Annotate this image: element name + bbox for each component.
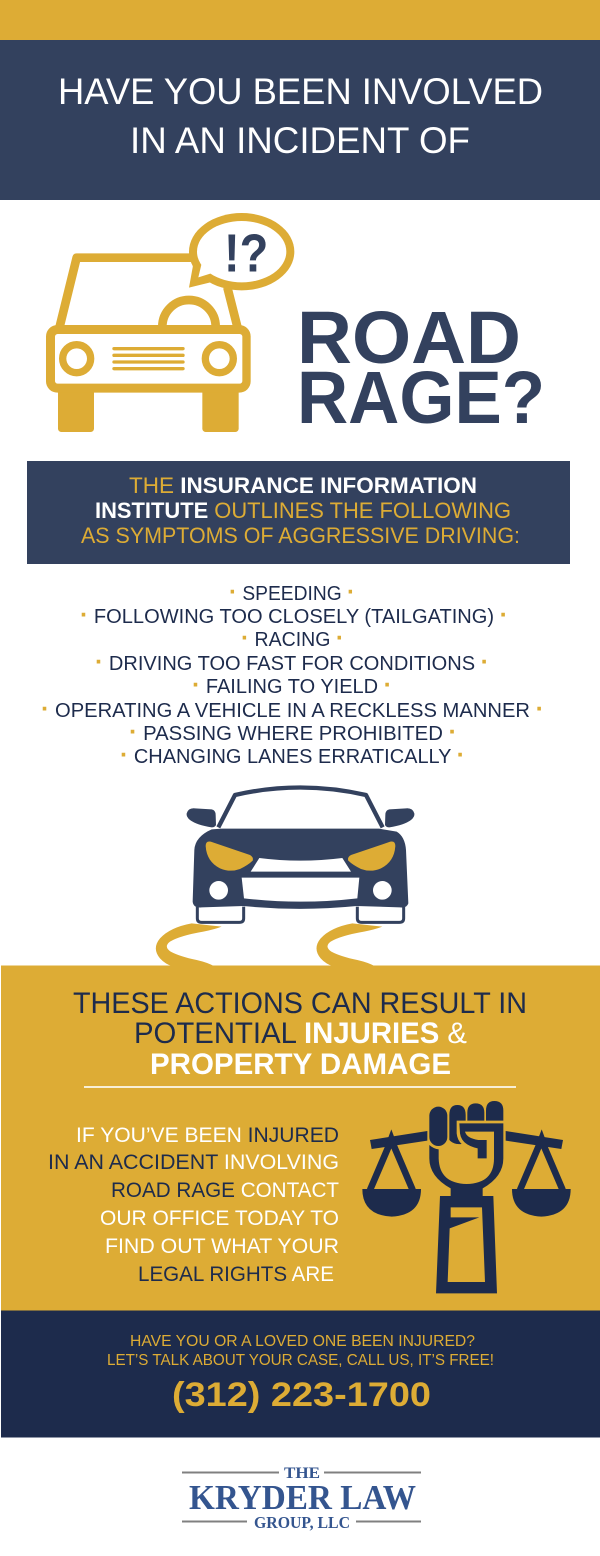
text block: legal rights: IF YOU’VE BEEN INJURED	[76, 1124, 339, 1147]
icon: car with speech bubble	[46, 213, 294, 432]
panel: footer phone call to action: LET’S TALK ABOUT YOUR CASE, CALL US, IT’S FREE!	[107, 1352, 494, 1369]
title: road rage: RAGE?	[297, 356, 545, 439]
text block: legal rights: LEGAL RIGHTS ARE	[138, 1263, 334, 1286]
phone number: (312) 223-1700	[172, 1376, 431, 1414]
panel: footer phone call to action	[1, 1310, 600, 1438]
panel: insurance information institute: AS SYMPTOMS OF AGGRESSIVE DRIVING:	[81, 523, 520, 548]
list: aggressive driving symptoms: · CHANGING LANES ERRATICALLY ·	[120, 741, 465, 769]
panel: footer phone call to action: HAVE YOU OR A LOVED ONE BEEN INJURED?	[130, 1333, 475, 1350]
icon: fist holding scales of justice	[362, 1101, 571, 1293]
heading: injuries and property damage: POTENTIAL INJURIES &	[134, 1017, 467, 1050]
logo: the kryder law group: THE	[284, 1465, 320, 1482]
list: aggressive driving symptoms: · DRIVING TOO FAST FOR CONDITIONS ·	[95, 648, 489, 676]
heading line 1: HAVE YOU BEEN INVOLVED	[58, 71, 543, 112]
title: road rage	[297, 296, 545, 439]
logo: the kryder law group: KRYDER LAW	[189, 1478, 416, 1517]
list: aggressive driving symptoms: · RACING ·	[241, 624, 344, 652]
top gold band	[0, 0, 600, 40]
text block: legal rights: IN AN ACCIDENT INVOLVING	[48, 1151, 339, 1174]
panel: insurance information institute: THE INSURANCE INFORMATION	[129, 473, 477, 498]
heading: injuries and property damage: THESE ACTIONS CAN RESULT IN	[73, 987, 527, 1020]
panel: insurance information institute	[27, 461, 570, 564]
heading line 2: IN AN INCIDENT OF	[130, 120, 470, 161]
icon: aggressive car with skid tracks	[156, 787, 414, 967]
text block: legal rights: OUR OFFICE TODAY TO	[100, 1207, 339, 1230]
list: aggressive driving symptoms: · OPERATING A VEHICLE IN A RECKLESS MANNER ·	[41, 695, 544, 723]
text block: legal rights: ROAD RAGE CONTACT	[111, 1179, 339, 1202]
logo: the kryder law group	[182, 1465, 421, 1532]
text block: legal rights	[48, 1124, 339, 1286]
list: aggressive driving symptoms: · SPEEDING ·	[229, 578, 355, 606]
title: road rage: ROAD	[297, 296, 521, 379]
logo: the kryder law group: GROUP, LLC	[254, 1513, 350, 1532]
panel: insurance information institute: INSTITUTE OUTLINES THE FOLLOWING	[95, 498, 511, 523]
panel: gold call to action	[1, 966, 600, 1310]
list: aggressive driving symptoms	[41, 578, 544, 769]
list: aggressive driving symptoms: · FOLLOWING TOO CLOSELY (TAILGATING) ·	[80, 601, 508, 629]
heading: injuries and property damage: PROPERTY DAMAGE	[150, 1048, 451, 1081]
list: aggressive driving symptoms: · PASSING WHERE PROHIBITED ·	[129, 718, 457, 746]
list: aggressive driving symptoms: · FAILING TO YIELD ·	[192, 671, 392, 699]
header panel	[0, 40, 600, 200]
bubble text: !?	[224, 225, 268, 284]
heading: injuries and property damage	[73, 987, 527, 1081]
text block: legal rights: FIND OUT WHAT YOUR	[105, 1235, 339, 1258]
